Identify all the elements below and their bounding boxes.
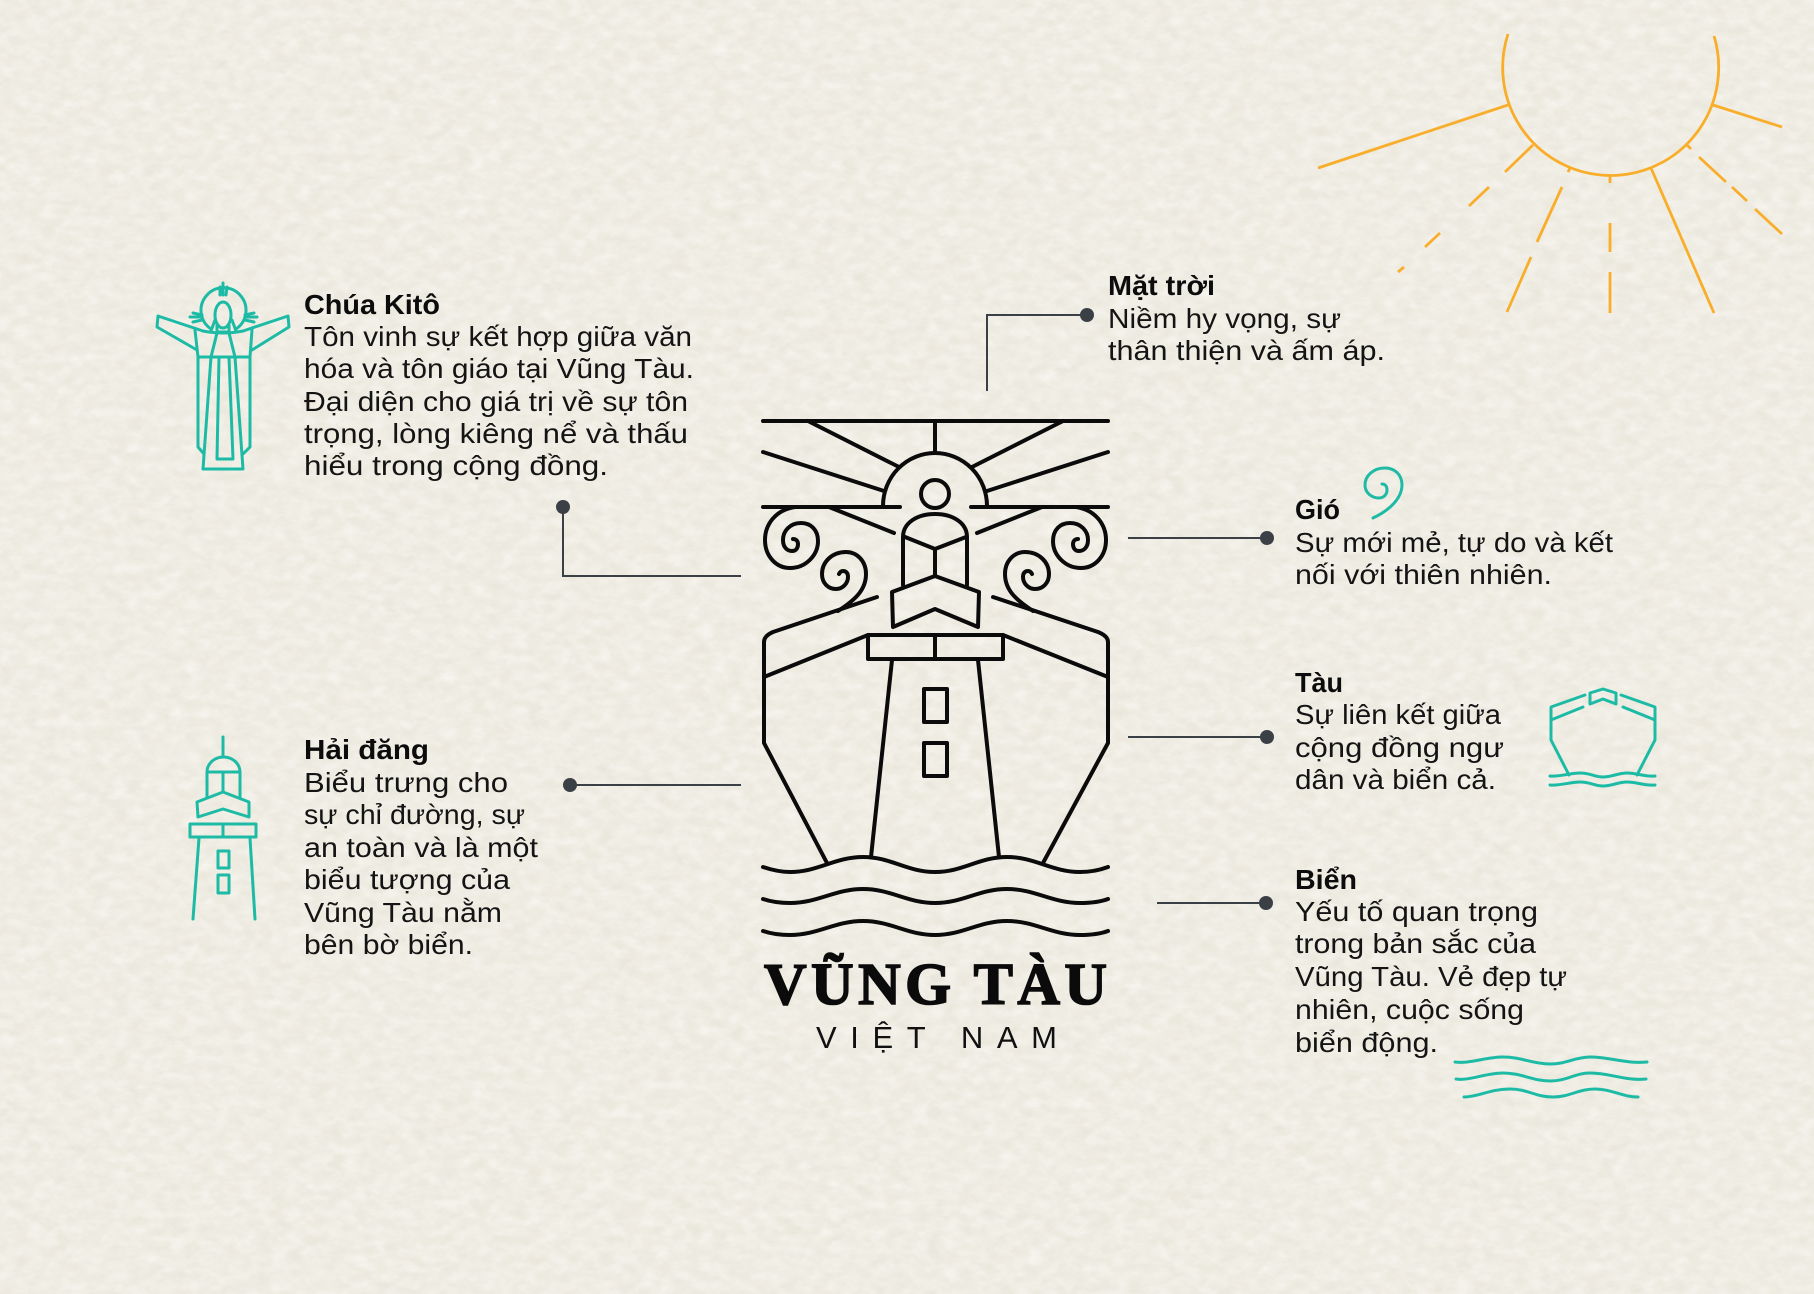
text: Hải đăng: biểu tượng của bbox=[304, 864, 511, 895]
text: Mặt trời bbox=[1108, 270, 1385, 366]
central logo emblem bbox=[763, 421, 1108, 935]
text: Gió: nối với thiên nhiên. bbox=[1295, 559, 1552, 590]
text: Tàu: Sự liên kết giữa bbox=[1295, 699, 1502, 730]
icon: ship bbox=[1550, 689, 1655, 786]
text: Hải đăng: an toàn và là một bbox=[304, 832, 538, 863]
text: Biển: nhiên, cuộc sống bbox=[1295, 994, 1524, 1025]
text: Mặt trời: thân thiện và ấm áp. bbox=[1108, 335, 1385, 366]
text: Hải đăng: Vũng Tàu nằm bbox=[304, 897, 502, 928]
icon: Christ statue bbox=[157, 283, 289, 469]
text: Hải đăng bbox=[304, 734, 538, 960]
lighthouse tower bbox=[868, 635, 1003, 857]
text: Hải đăng: bên bờ biển. bbox=[304, 929, 473, 960]
connector: Chúa Kitô bbox=[556, 500, 741, 576]
lighthouse lantern bbox=[892, 514, 979, 627]
text: Chúa Kitô: Tôn vinh sự kết hợp giữa văn bbox=[304, 321, 692, 352]
text: Chúa Kitô: hiểu trong cộng đồng. bbox=[304, 450, 608, 481]
title: VŨNG TÀU: VŨNG TÀU bbox=[764, 951, 1107, 1017]
sea waves bbox=[763, 857, 1108, 935]
text: Mặt trời: Niềm hy vọng, sự bbox=[1108, 303, 1341, 334]
text: Biển: Biển bbox=[1295, 864, 1357, 895]
text: Tàu: dân và biển cả. bbox=[1295, 764, 1496, 795]
text: Biển: Yếu tố quan trọng bbox=[1295, 896, 1538, 927]
text: Hải đăng: Hải đăng bbox=[304, 734, 429, 765]
text: Tàu bbox=[1295, 667, 1504, 795]
icon: wind swirl bbox=[1365, 468, 1402, 518]
connector: Mặt trời bbox=[987, 308, 1094, 391]
connector: Biển bbox=[1157, 896, 1273, 910]
text: Gió bbox=[1295, 494, 1613, 590]
text: Chúa Kitô: hóa và tôn giáo tại Vũng Tàu. bbox=[304, 353, 694, 384]
text: Chúa Kitô: Chúa Kitô bbox=[304, 289, 440, 320]
ship hull bbox=[764, 597, 1108, 863]
text: Biển: trong bản sắc của bbox=[1295, 928, 1537, 959]
connector: Tàu bbox=[1128, 730, 1274, 744]
text: Hải đăng: sự chỉ đường, sự bbox=[304, 799, 525, 830]
text: Chúa Kitô: Đại diện cho giá trị về sự tôn bbox=[304, 386, 688, 417]
text: Tàu: cộng đồng ngư bbox=[1295, 732, 1504, 763]
connector: Hải đăng bbox=[563, 778, 741, 792]
icon: waves bbox=[1455, 1057, 1647, 1097]
subtitle: VIỆT NAM: VIỆT NAM bbox=[816, 1020, 1057, 1055]
sun illustration bbox=[1318, 34, 1782, 313]
text: Mặt trời: Mặt trời bbox=[1108, 270, 1215, 301]
icon: small lighthouse bbox=[190, 737, 256, 919]
text: Chúa Kitô bbox=[304, 289, 694, 481]
wind spirals bbox=[765, 507, 1106, 611]
text: Gió: Sự mới mẻ, tự do và kết bbox=[1295, 527, 1613, 558]
connector: Gió bbox=[1128, 531, 1274, 545]
text: Biển: Vũng Tàu. Vẻ đẹp tự bbox=[1295, 961, 1567, 992]
text: Chúa Kitô: trọng, lòng kiêng nể và thấu bbox=[304, 418, 688, 449]
text: Hải đăng: Biểu trưng cho bbox=[304, 767, 508, 798]
text: Biển: biển động. bbox=[1295, 1027, 1438, 1058]
text: Biển bbox=[1295, 864, 1567, 1058]
text: Gió: Gió bbox=[1295, 494, 1340, 525]
text: Tàu: Tàu bbox=[1295, 667, 1343, 698]
sun rays and bars bbox=[763, 421, 1108, 533]
